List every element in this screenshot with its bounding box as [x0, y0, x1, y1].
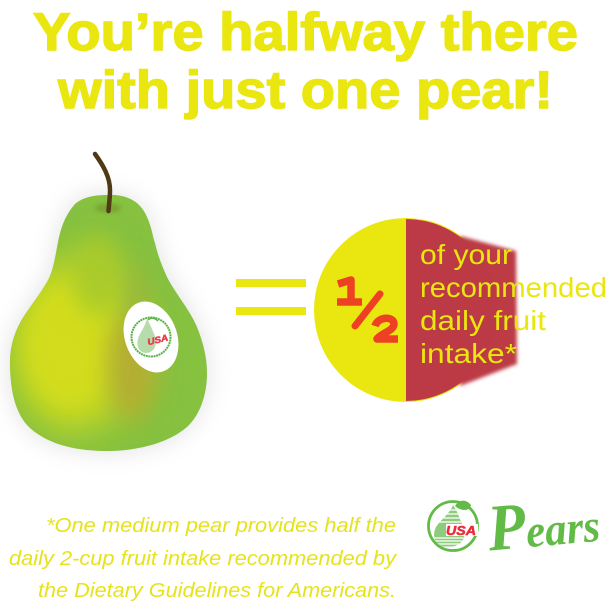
title: You’re halfway there [33, 3, 578, 62]
title: with just one pear! [57, 61, 553, 120]
footnote: *One medium pear provides half the [46, 514, 396, 537]
half circle caption: intake* [420, 338, 517, 369]
half circle caption: recommended [420, 272, 607, 303]
equals sign [236, 279, 306, 315]
pear body [10, 194, 207, 451]
USA Pears logo: USA [446, 523, 476, 538]
pear illustration [0, 154, 220, 460]
half circle graphic [314, 218, 607, 402]
USA Pears logo [427, 500, 598, 552]
USA Pears logo: Pears [484, 483, 602, 565]
half circle caption: of your [420, 239, 512, 270]
red half with blurred edge [406, 219, 517, 401]
title [33, 3, 578, 120]
pear stem [95, 154, 110, 211]
half circle caption [420, 239, 607, 369]
fraction one half [337, 280, 398, 339]
half circle caption: daily fruit [420, 305, 546, 336]
footnote [9, 514, 398, 602]
footnote: daily 2-cup fruit intake recommended by [9, 547, 398, 570]
footnote: the Dietary Guidelines for Americans. [38, 579, 396, 602]
sticker [114, 294, 188, 380]
sticker: USA [146, 332, 169, 347]
